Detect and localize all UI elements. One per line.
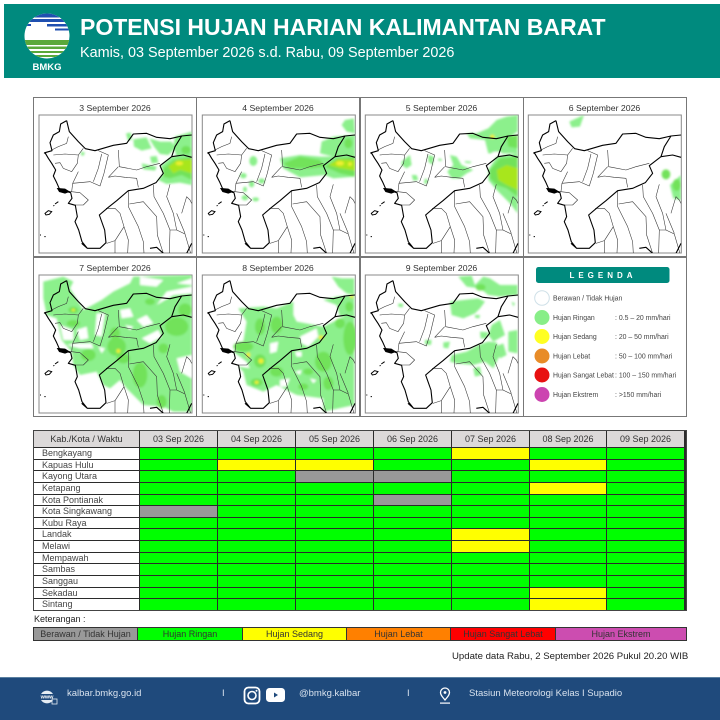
key: light rain [138,628,243,640]
rainfall shading [43,275,192,412]
row: Sanggau: Sanggau [42,576,78,586]
map outline [366,121,518,253]
table header row: 03 Sep 2026 [153,434,204,444]
map outline [203,281,355,413]
social handle: @bmkg.kalbar [299,688,360,699]
panel: legend [524,258,686,416]
key: moderate rain [243,628,347,640]
row: Melawi [34,541,684,552]
colour key bar [33,627,687,641]
map: 7 September [40,275,192,413]
row: Kubu Raya [34,518,684,528]
rainfall shading [402,115,518,213]
table header row [34,431,684,447]
legend item: heavy rain: Hujan Lebat [553,354,590,360]
row: Sambas: Sambas [42,564,75,574]
legend item: heavy rain: : 50 – 100 mm/hari [615,354,673,360]
row: Sekadau [34,588,684,598]
row: Kubu Raya: Kubu Raya [42,518,87,528]
key: heavy rain [347,628,451,640]
legend item: moderate rain [534,329,669,344]
row: Ketapang: Ketapang [42,483,81,493]
row: Kayong Utara: Kayong Utara [42,471,97,481]
legend item: light rain: Hujan Ringan [553,315,595,322]
key: no rain: Berawan / Tidak Hujan [40,629,131,639]
key: very heavy rain [451,628,556,640]
row: Ketapang [34,483,684,494]
table header row: 05 Sep 2026 [309,434,360,444]
separator: I [407,688,410,699]
row: Sambas [34,564,684,575]
icon: location pin [440,687,450,704]
table header row: 07 Sep 2026 [465,434,516,444]
row: Kapuas Hulu: Kapuas Hulu [42,460,94,470]
rainfall shading [398,276,518,377]
key: heavy rain: Hujan Lebat [374,629,423,639]
panel: 3 September 2026: 3 September 2026 [79,103,151,113]
row: Landak [34,529,684,540]
key: extreme rain [556,628,686,640]
icon: BMKG logo [24,14,70,73]
panel: 9 September 2026: 9 September 2026 [406,263,477,273]
update note: Update data Rabu, 2 September 2026 Pukul 20.20 WIB [452,651,688,662]
panel: 4 September 2026 [196,98,360,256]
panel: 7 September 2026: 7 September 2026 [79,263,151,273]
map: 9 September [366,275,518,413]
row: Sintang [34,599,684,610]
row: Kota Pontianak [34,494,684,505]
row: Kayong Utara [34,471,684,482]
map outline [203,121,355,253]
map: 6 September [529,115,682,253]
row: Mempawah [34,553,684,563]
panel: 5 September 2026 [360,98,524,256]
map outline [40,121,192,253]
legend item: no rain [535,291,622,305]
panel: 4 September 2026: 4 September 2026 [242,103,314,113]
legend item: extreme rain: Hujan Ekstrem [553,392,598,399]
header banner [4,4,720,78]
panel: 6 September 2026: 6 September 2026 [569,103,640,113]
icon: website globe: www [40,694,54,700]
separator: I [222,688,225,699]
table header row: Kab./Kota / Waktu [50,434,123,444]
station name: Stasiun Meteorologi Kelas I Supadio [469,688,622,699]
row: Kota Pontianak: Kota Pontianak [42,494,103,504]
legend item: light rain: : 0.5 – 20 mm/hari [615,315,671,322]
panel: 3 September 2026 [34,98,196,256]
row: Landak: Landak [42,529,72,539]
map: 5 September [366,115,518,253]
legend item: light rain [534,310,671,325]
icon: youtube [266,688,285,702]
table header row: 04 Sep 2026 [231,434,282,444]
row: Bengkayang: Bengkayang [42,448,92,458]
legend item: very heavy rain [534,368,677,382]
legend item: moderate rain: Hujan Sedang [553,334,597,341]
legend title [536,267,670,283]
legend item: heavy rain [534,348,673,364]
icon: BMKG logo: BMKG [32,62,62,73]
rainfall shading [569,115,681,200]
key: very heavy rain: Hujan Sangat Lebat [463,629,543,639]
panel: 6 September 2026 [524,98,686,256]
map: 3 September [40,120,192,253]
subtitle: Kamis, 03 September 2026 s.d. Rabu, 09 September 2026 [80,45,454,61]
rainfall shading [81,132,192,185]
legend title: LEGENDA [569,271,637,280]
table header row: 06 Sep 2026 [387,434,438,444]
forecast table [34,431,686,610]
key: extreme rain: Hujan Ekstrem [591,629,651,639]
legend item: no rain: Berawan / Tidak Hujan [553,296,622,302]
row: Sintang: Sintang [42,599,73,609]
map: 8 September [203,276,356,413]
forecast map grid [33,97,687,417]
title: POTENSI HUJAN HARIAN KALIMANTAN BARAT [80,14,606,40]
icon: instagram [244,686,260,704]
rainfall shading [240,118,355,201]
row: Melawi: Melawi [42,541,70,551]
icon: website globe [40,690,58,704]
legend item: very heavy rain: : 100 – 150 mm/hari [615,372,677,380]
map outline [529,121,681,253]
row: Sanggau [34,576,684,587]
panel: 9 September 2026 [360,258,524,416]
table header row: 09 Sep 2026 [620,434,671,444]
panel: 7 September 2026 [34,258,196,416]
panel: 8 September 2026 [196,258,360,416]
row: Bengkayang [34,448,684,459]
table header row: 08 Sep 2026 [542,434,594,444]
row: Kota Singkawang: Kota Singkawang [42,506,112,516]
footer bar [0,677,720,720]
legend item: extreme rain: : >150 mm/hari [615,392,662,399]
legend item: extreme rain [534,387,662,402]
legend item: moderate rain: : 20 – 50 mm/hari [615,334,669,341]
map: 4 September [203,117,356,253]
row: Sekadau: Sekadau [42,588,78,598]
key: light rain: Hujan Ringan [163,629,217,639]
row: Kapuas Hulu [34,460,684,470]
keterangan label: Keterangan : [34,614,86,624]
panel: 8 September 2026: 8 September 2026 [242,263,314,273]
legend item: very heavy rain: Hujan Sangat Lebat [553,372,614,380]
row: Kota Singkawang [34,506,684,517]
map outline [366,281,518,413]
rainfall shading [233,277,357,412]
key: moderate rain: Hujan Sedang [266,629,323,639]
website: kalbar.bmkg.go.id [67,688,141,699]
panel: 5 September 2026: 5 September 2026 [406,103,477,113]
row: Mempawah: Mempawah [42,553,89,563]
map outline [40,281,192,413]
